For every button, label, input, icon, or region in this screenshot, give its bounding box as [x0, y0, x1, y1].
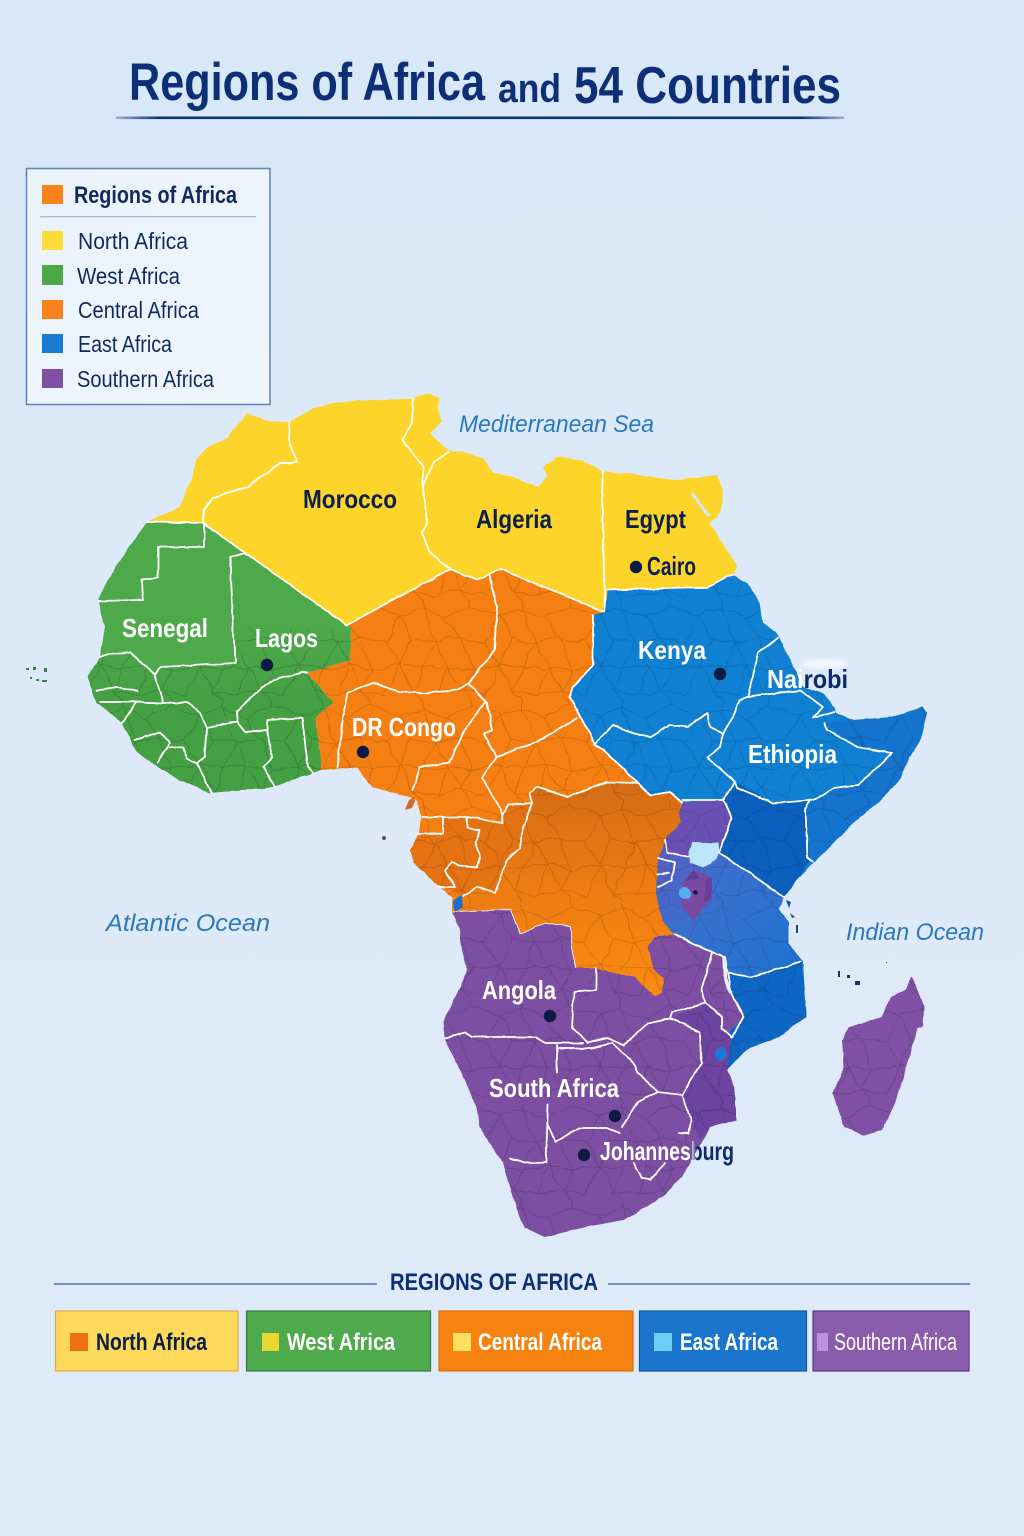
legend heading: Regions of Africa: [74, 182, 238, 209]
legend item: Southern Africa: Southern Africa: [77, 366, 214, 392]
country label: South Africa: [489, 1073, 621, 1122]
ghost smudge above Nairobi: [801, 659, 849, 669]
bottom chip: East Africa: East Africa: [680, 1329, 779, 1356]
small islands: [26, 667, 887, 985]
small enclave: [453, 896, 464, 912]
country label: Algeria: Algeria: [476, 504, 552, 534]
city label: Nairobi: Nairobi: [767, 664, 848, 694]
country label: Angola: [482, 975, 556, 1022]
city label: Johannesburg: Johannesburg: [600, 1136, 734, 1166]
region: Kenya dark blue: [719, 782, 811, 897]
bottom chip: Southern Africa: Southern Africa: [834, 1329, 957, 1356]
lake victoria: [689, 842, 719, 868]
region: Southern Africa: [430, 900, 760, 1250]
region: Tanzania blue purple: [656, 800, 803, 977]
country label: DR Congo: [352, 712, 456, 758]
city label: Johannesburg: [578, 1136, 734, 1166]
legend item: Central Africa: [42, 297, 199, 323]
country label: Angola: Angola: [482, 975, 556, 1005]
region: Mozambique south shading: [672, 1003, 736, 1140]
country label: Kenya: [638, 635, 726, 680]
city label: Cairo: [630, 551, 696, 581]
region: Mozambique dark blue: [724, 962, 806, 1070]
country label: Senegal: Senegal: [122, 613, 208, 643]
title: and: [498, 67, 561, 111]
africa map: [60, 394, 940, 1250]
title: [116, 53, 844, 119]
city label: Lagos: Lagos: [255, 623, 318, 653]
country label: DR Congo: DR Congo: [352, 712, 456, 742]
legend item: West Africa: [42, 263, 180, 289]
city label: Lagos: [255, 623, 318, 671]
title: Regions of Africa: [129, 53, 485, 112]
country label: Morocco: Morocco: [303, 484, 397, 514]
bottom chip: West Africa: West Africa: [287, 1329, 396, 1356]
region: DR Congo shading: [460, 782, 681, 997]
bottom legend heading: REGIONS OF AFRICA: [390, 1269, 598, 1296]
bottom chip: Central Africa: Central Africa: [478, 1329, 603, 1356]
legend item: East Africa: [42, 331, 172, 357]
great lakes purple blob: [679, 870, 712, 920]
country label: Kenya: Kenya: [638, 635, 706, 665]
region: North Africa: [147, 394, 737, 625]
bottom chip: Southern Africa: [813, 1311, 969, 1371]
legend item: North Africa: North Africa: [78, 228, 188, 254]
legend item: East Africa: East Africa: [78, 331, 172, 357]
country label: Ethiopia: Ethiopia: [748, 739, 837, 769]
region: Madagascar: [832, 976, 924, 1136]
region: East Africa: [560, 570, 940, 1080]
bottom chip: East Africa: [640, 1311, 806, 1371]
bottom chip: North Africa: [56, 1311, 238, 1371]
region: Uganda purple: [665, 800, 732, 857]
bottom chip: Central Africa: [439, 1311, 633, 1371]
region: West Africa: [60, 522, 380, 820]
sea label: Indian Ocean: Indian Ocean: [846, 919, 984, 946]
city label: Cairo: Cairo: [647, 551, 696, 581]
legend panel: [26, 168, 270, 404]
title: 54 Countries: [574, 57, 841, 115]
legend item: West Africa: West Africa: [77, 263, 180, 289]
country label: Egypt: Egypt: [625, 504, 686, 534]
blue marker in Mozambique: [715, 1048, 727, 1060]
region: Central Africa: [308, 568, 682, 996]
bottom chip: North Africa: North Africa: [96, 1329, 208, 1356]
legend item: Central Africa: Central Africa: [78, 297, 199, 323]
sea label: Atlantic Ocean: Atlantic Ocean: [104, 910, 270, 937]
country label: South Africa: South Africa: [489, 1073, 619, 1103]
region: Somalia shading: [805, 707, 927, 862]
bottom chip: West Africa: [246, 1311, 430, 1371]
sea label: Mediterranean Sea: Mediterranean Sea: [459, 411, 654, 438]
